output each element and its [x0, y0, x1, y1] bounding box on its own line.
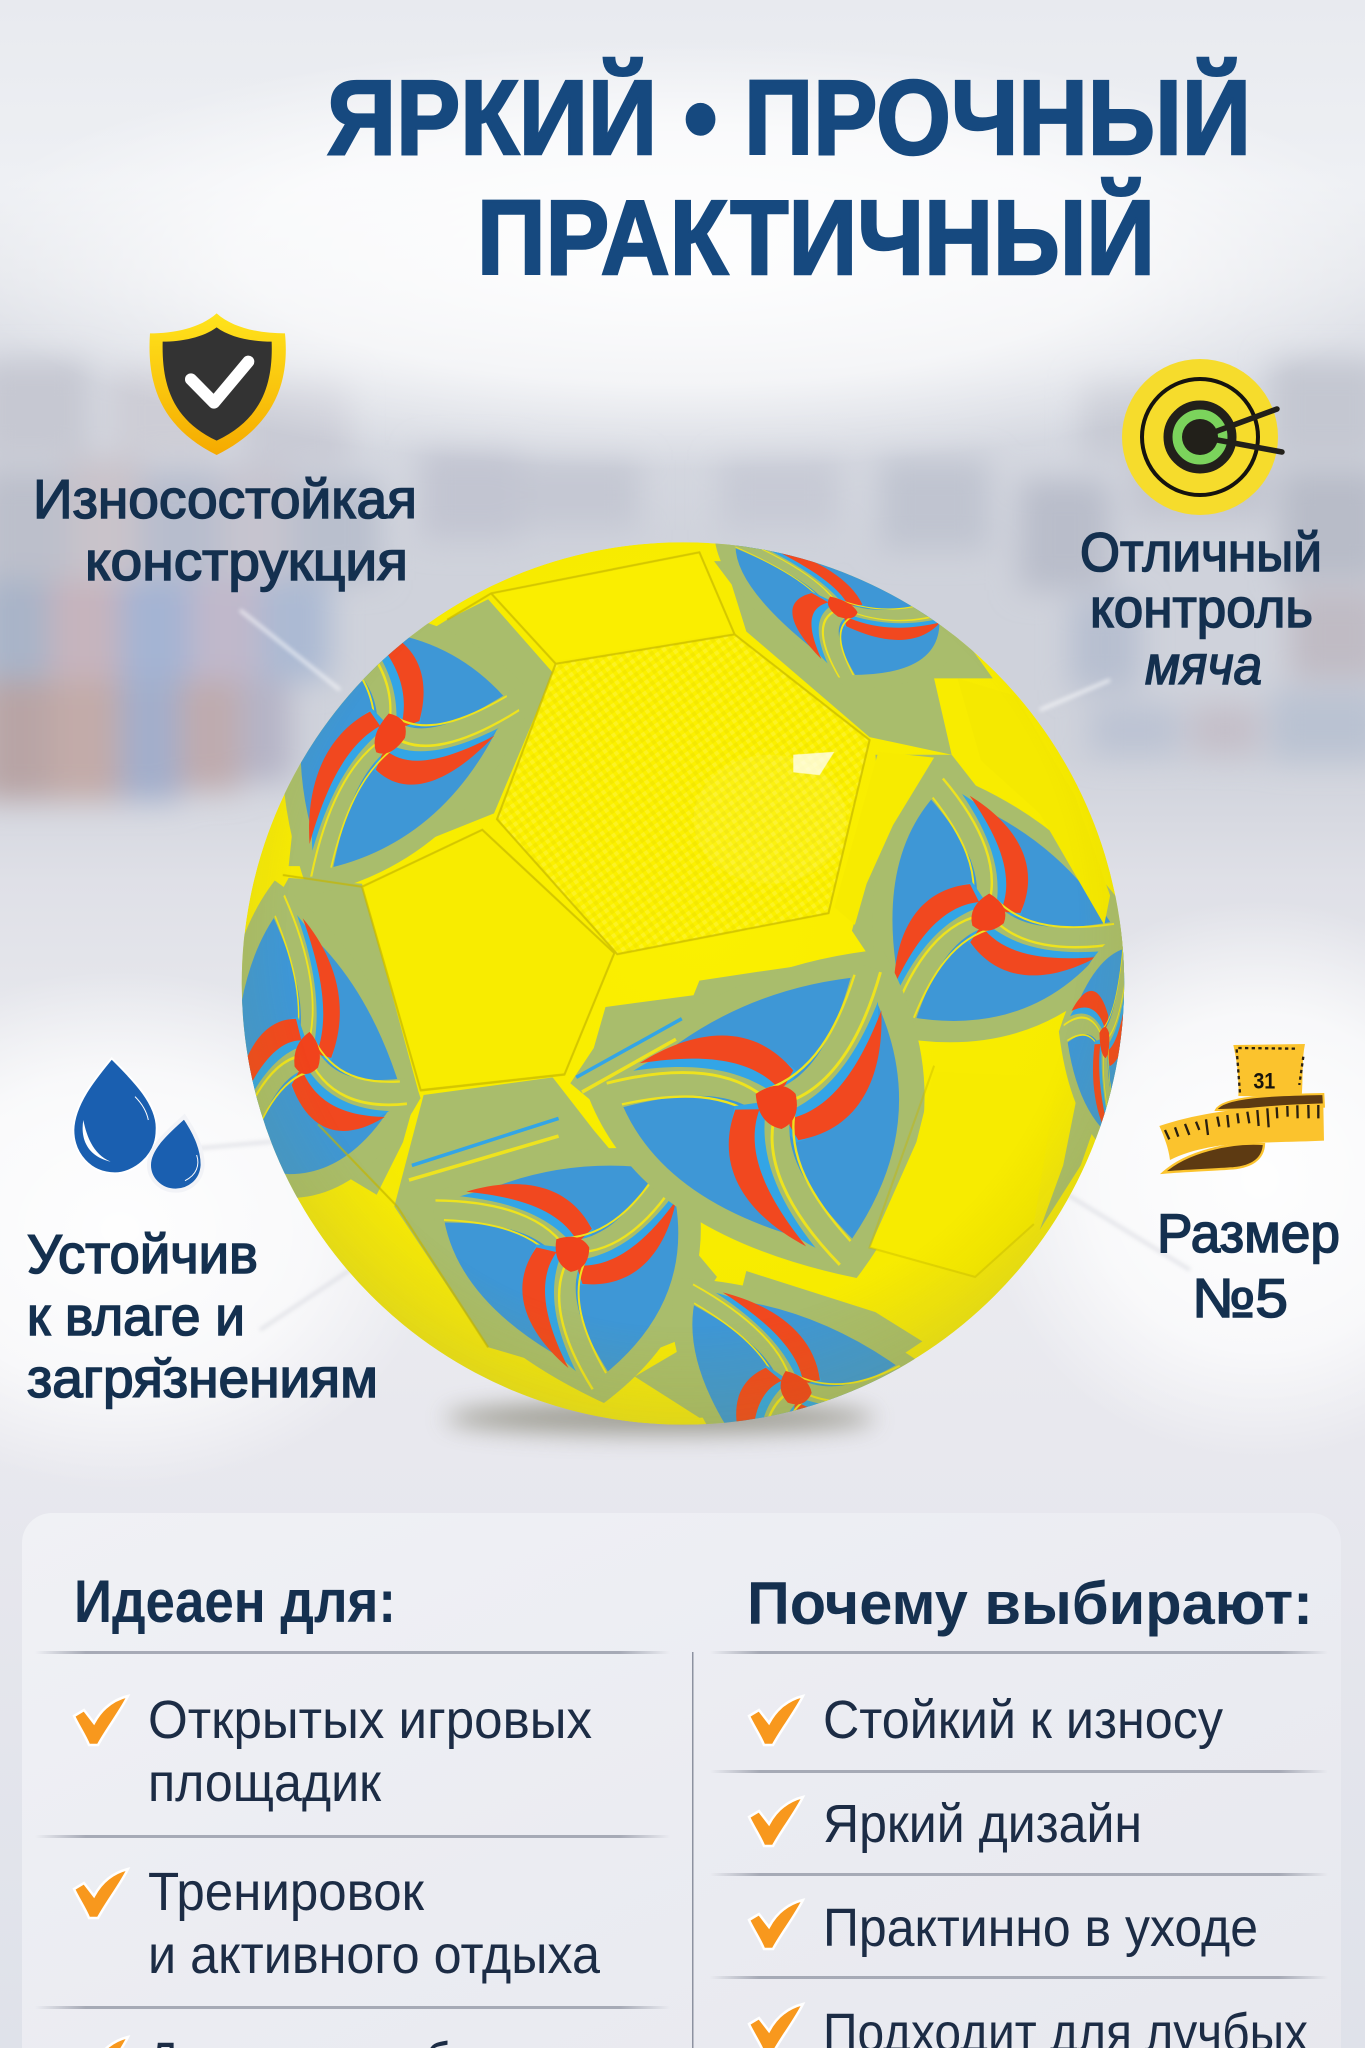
swirl: far left [242, 880, 421, 1198]
swirl: right [892, 778, 1124, 1042]
light rays around the ball [180, 610, 1190, 1330]
label: ball control: Отличный [1080, 521, 1322, 583]
swirl: lower left [436, 1148, 701, 1403]
label: size 5 [1157, 1202, 1340, 1329]
football [242, 542, 1124, 1425]
title: ПРАКТИЧНЫЙ [477, 178, 1155, 297]
label: wear resistant [33, 468, 417, 592]
sage patch shapes [248, 561, 1125, 1418]
icon: measuring tape [1159, 1044, 1324, 1173]
icon: target with arrows [1122, 359, 1282, 515]
swirl: centre [587, 948, 925, 1292]
list item: playgrounds: площадик [148, 1753, 381, 1813]
label: size 5: №5 [1192, 1267, 1288, 1329]
label: ball control: контроль [1090, 577, 1313, 639]
list item: training: и активного отдыха [148, 1925, 601, 1985]
label: moisture resistance: к влаге и [27, 1285, 245, 1347]
column: why choose [747, 1570, 1313, 2048]
swirl: upper left [284, 623, 520, 884]
heading: ideal for: Идеаен для: [74, 1568, 396, 1635]
label: moisture resistance [27, 1223, 378, 1409]
icon: water drops [73, 1058, 203, 1191]
title: ЯРКИЙ • ПРОЧНЫЙ [327, 58, 1251, 177]
icon: shield with check [150, 313, 286, 455]
accent stripes on centre patch [409, 1019, 682, 1180]
glossy highlight [793, 752, 834, 775]
label: size 5: Размер [1157, 1202, 1340, 1264]
heading: why choose: Почему выбирают: [747, 1570, 1313, 1637]
seams [283, 552, 1034, 1347]
list item: training: Тренировок [148, 1862, 424, 1922]
list item: design: Яркий дизайн [823, 1794, 1142, 1854]
swirl: top right [716, 544, 958, 678]
list item: playgrounds [74, 1690, 592, 1813]
swirl: far right [1058, 932, 1124, 1140]
list item: playgrounds: Открытых игровых [148, 1690, 592, 1750]
label: ball control: мяча [1145, 634, 1262, 696]
column: ideal for [74, 1568, 601, 2048]
title [327, 58, 1251, 297]
list item: wear: Стойкий к износу [823, 1690, 1223, 1750]
label: ball control [1080, 521, 1322, 696]
list item: training [74, 1862, 601, 1985]
yellow panels [362, 886, 376, 933]
label: moisture resistance: Устойчив [27, 1223, 258, 1285]
ball shadow [445, 1402, 875, 1434]
swirl: bottom [674, 1281, 915, 1424]
label: moisture resistance: загря̆знениям [27, 1347, 378, 1409]
icon: measuring tape: 31 [1253, 1068, 1275, 1093]
label: wear resistant: Износостойкая [33, 468, 417, 530]
panel: bottom info [22, 1513, 1341, 2048]
list item: care: Практинно в уходе [823, 1898, 1258, 1958]
label: wear resistant: конструкция [85, 530, 408, 592]
